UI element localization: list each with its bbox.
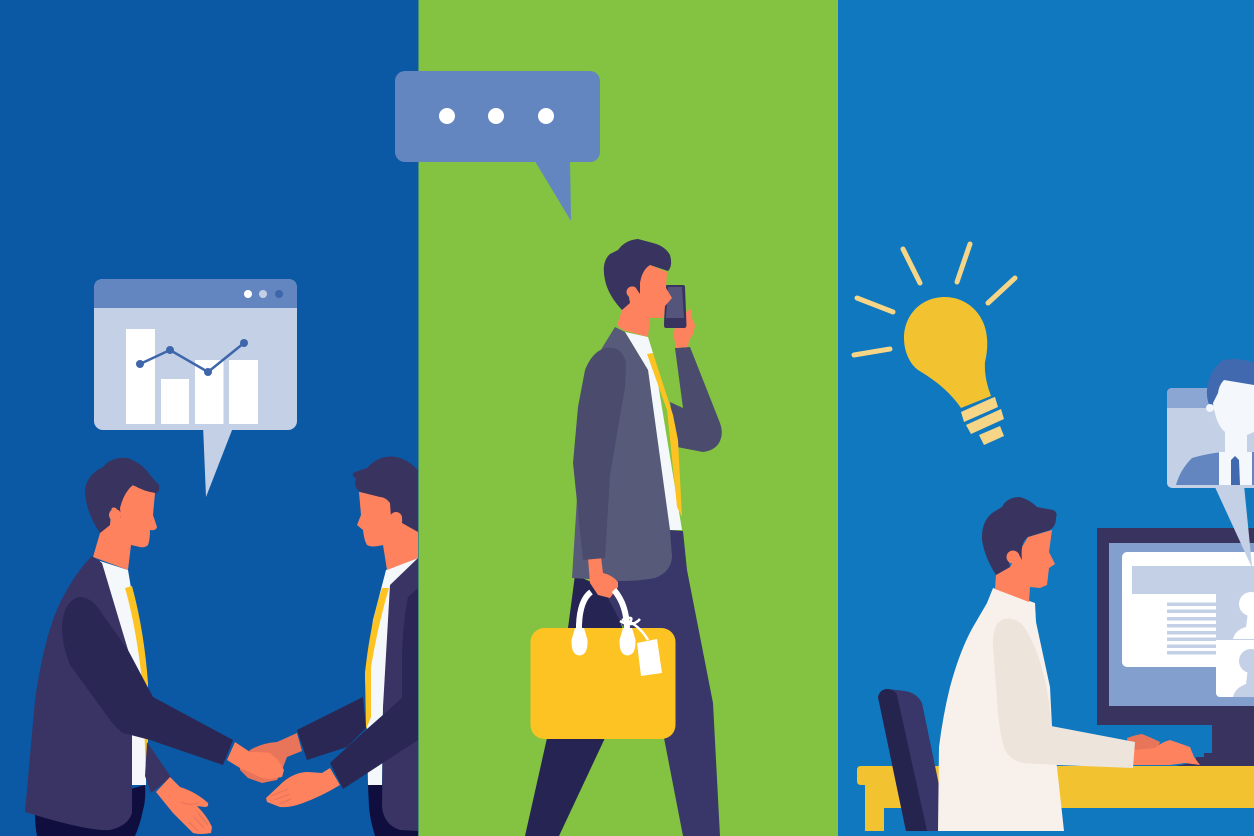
front leg	[590, 530, 720, 836]
speech bubble: bar and line chart	[94, 279, 297, 497]
hair	[353, 457, 418, 532]
lower jacket sleeve	[145, 742, 171, 793]
hand holding bag	[588, 557, 618, 598]
bubble tail	[203, 425, 234, 497]
monitor frame	[1097, 528, 1254, 725]
neck and face	[93, 485, 157, 570]
panel: left blue background	[0, 0, 418, 836]
jacket	[572, 327, 672, 581]
handle base left	[571, 628, 588, 656]
avatar, lower	[1233, 649, 1254, 697]
window header	[94, 279, 297, 308]
panel: centre green background	[418, 0, 838, 836]
seated man's ear	[1006, 550, 1020, 564]
contact shirt	[1219, 452, 1252, 485]
hair	[604, 239, 671, 310]
seated man's hair	[982, 497, 1057, 575]
bubble tail	[533, 158, 571, 221]
contact hair	[1207, 359, 1254, 412]
bubble body	[395, 71, 600, 162]
back hand and wrist	[240, 733, 302, 783]
neck and face	[617, 265, 672, 337]
chair back, light	[878, 689, 940, 831]
document window	[1122, 552, 1254, 667]
window dots	[244, 290, 283, 298]
ear	[390, 512, 402, 518]
jacket	[382, 558, 418, 831]
jacket	[25, 556, 132, 830]
bars	[126, 329, 258, 424]
tag string	[620, 618, 648, 640]
ear	[626, 286, 638, 298]
handle base right	[619, 628, 636, 656]
desk	[857, 766, 1254, 831]
contact ear	[1206, 404, 1214, 412]
tie	[125, 586, 148, 780]
avatar, upper	[1233, 592, 1254, 639]
handshake	[227, 733, 302, 783]
raised arm	[670, 347, 722, 452]
right figure: businessman shaking hands, clipped by centre panel	[266, 457, 420, 836]
screw base	[961, 397, 1004, 445]
monitor stand	[1170, 725, 1254, 767]
raised sleeve	[62, 597, 233, 765]
bulb glass	[904, 297, 991, 408]
shirt	[100, 561, 147, 785]
profile card, lower	[1216, 667, 1248, 697]
chair back, dark	[878, 689, 927, 831]
left figure: businessman shaking hands	[25, 458, 233, 836]
jacket sleeve	[573, 348, 626, 560]
icon: yellow briefcase with tag	[530, 590, 676, 739]
desk scene: computer, desk, chair and man	[857, 359, 1254, 831]
document lines	[1167, 602, 1216, 654]
lower hand	[156, 777, 212, 834]
speech bubble: ellipsis	[395, 71, 600, 221]
ear	[109, 509, 121, 521]
contact tie	[1231, 456, 1240, 485]
phone	[664, 285, 686, 328]
bubble tail	[1215, 488, 1252, 566]
shirt	[625, 332, 682, 530]
forearm, front	[330, 588, 418, 789]
front hand	[1133, 740, 1200, 765]
seated man's shirt	[938, 588, 1064, 831]
tag	[637, 639, 662, 676]
centre figure: man walking on the phone	[525, 239, 722, 836]
monitor screen	[1109, 543, 1254, 706]
bubble header	[1167, 388, 1214, 408]
neck and face	[357, 492, 418, 570]
contact neck and face	[1213, 380, 1254, 455]
hair	[85, 458, 159, 533]
rays	[854, 244, 1015, 355]
bubble body	[94, 279, 297, 430]
tie	[647, 353, 682, 517]
icon: light bulb with rays	[854, 244, 1015, 445]
trend line	[136, 339, 248, 376]
panel: right blue background	[838, 0, 1254, 836]
hand on phone	[673, 309, 695, 348]
back hand	[1127, 734, 1160, 750]
shirt	[365, 558, 418, 785]
bag body	[530, 628, 676, 739]
desk top	[857, 766, 1254, 831]
video call bubble	[1167, 359, 1254, 572]
tie	[365, 588, 389, 729]
front hand and wrist	[227, 742, 284, 779]
open hand	[266, 768, 340, 807]
chair	[878, 689, 940, 831]
window header band	[1132, 566, 1254, 640]
seated man's hands	[1127, 734, 1200, 765]
trousers	[35, 785, 145, 836]
monitor	[1097, 528, 1254, 767]
seated man's sleeve	[993, 618, 1135, 768]
dots	[439, 108, 554, 124]
trousers	[368, 785, 420, 836]
rear leg	[525, 575, 623, 836]
handle	[579, 590, 627, 640]
bubble body	[1167, 388, 1254, 488]
seated man's neck and face	[995, 530, 1055, 602]
contact jacket	[1176, 452, 1254, 485]
upper arm, back	[297, 697, 366, 760]
